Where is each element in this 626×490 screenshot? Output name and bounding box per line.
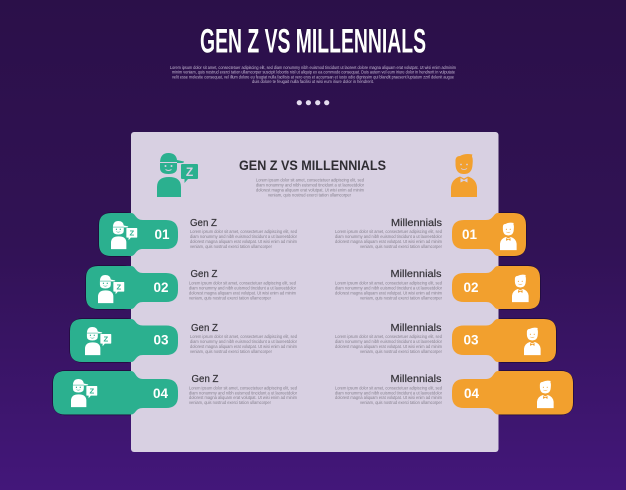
number 02: 02 [463,280,479,295]
row 1 right text: veniam, quis nostrud exerci tation ullamcorper [360,244,442,249]
row 4 right: millennial tab [452,371,573,414]
row 1 right: millennial tab [452,213,526,256]
row 4 right text: veniam, quis nostrud exerci tation ullamcorper [360,400,442,405]
main panel [131,132,498,452]
row 4 right text: Lorem ipsum dolor sit amet, consectetuer adipiscing elit, sed [335,386,442,390]
number 03: 03 [463,332,479,348]
row 3 left text: diam nonummy and nibh euismod tincidunt a ut laoreetdolor [190,339,297,344]
row 1 left text: veniam, quis nostrud exerci tation ullamcorper [190,244,272,249]
row 3 right text: diam nonummy and nibh euismod tincidunt a ut laoreetdolor [335,339,442,344]
intro text: minim veniam, quis nostrud exerci tation ullamcorper suscipit lobortis nisl ut aliquip ex ea commodo consequat. Duis autem vel eum iriure dolor in hendrerit in vulputate [172,70,455,75]
intro text: Lorem ipsum dolor sit amet, consectetuer adipiscing elit, sed diam nonummy nibh euismod tincidunt ut laoreet dolore magna aliquam erat volutpat. Ut wisi enim adminim [170,65,456,70]
intro text [170,65,456,84]
row 2 left text: Gen Z [190,269,218,280]
row 1 left text: diam nonummy and nibh euismod tincidunt a ut laoreetdolor [190,234,297,239]
row 2 left text [189,269,296,300]
number 04: 04 [464,386,479,401]
icon: millennial white 3 [524,328,541,355]
row 2 left text: dolorest magna aliquam erat volutpat. Ut wisi enim ad minim [189,290,296,296]
intro text: velit esse molestie consequat, vel illum dolore eu feugiat nulla facilisis at vero eros et accumsan et iusto odio dignissim qui blandit praesent luptatum zzril delenit augue [172,74,454,79]
number 03: 03 [153,332,169,348]
row 3 right: millennial tab [452,319,556,362]
intro text: duis dolore te feugait nulla facilisi ut wisi eum iriure dolor in hendrerit. [252,79,374,84]
panel description: Lorem ipsum dolor sit amet, consectetuer adipiscing elit, sed [256,178,364,182]
panel description: diam nonummy and nibh euismod tincidunt a ut laoreetdolor [256,182,364,188]
icon: millennial white 1 [500,223,517,250]
row 2 right text: Lorem ipsum dolor sit amet, consectetuer adipiscing elit, sed [335,280,442,286]
icon: gen z large: Z [186,165,193,179]
row 3 left text: dolorest magna aliquam erat volutpat. Ut wisi enim ad minim [190,344,297,349]
row 3 left text: Gen Z [191,323,218,334]
row 1 right text: Lorem ipsum dolor sit amet, consectetuer adipiscing elit, sed [335,229,442,234]
icon: millennial white 2 [512,275,529,302]
row 4 left text: Gen Z [192,374,218,385]
icon: gen z white 4: Z [89,387,94,396]
row 3 right text: dolorest magna aliquam erat volutpat. Ut wisi enim ad minim [335,344,442,349]
row 4 left text: Lorem ipsum dolor sit amet, consectetuer adipiscing elit, sed [189,386,297,390]
row 2 left text: diam nonummy and nibh euismod tincidunt a ut laoreetdolor [189,286,296,290]
row 1 left text: Lorem ipsum dolor sit amet, consectetuer adipiscing elit, sed [190,229,297,234]
row 4 left text: veniam, quis nostrud exerci tation ullamcorper [189,400,271,405]
row 1 right text: Millennials [391,218,442,229]
row 2 right: millennial tab [452,266,540,309]
row 2 left: gen z tab [86,266,178,309]
panel description: dolorest magna aliquam erat volutpat. Ut wisi enim ad minim [256,188,364,192]
row 4 right text [335,374,442,405]
row 1 left text [190,218,297,249]
number 01: 01 [154,227,170,242]
row 4 left text [189,374,297,405]
panel description: veniam, quis nostrud exerci tation ullamcorper [268,192,351,198]
title: GEN Z VS MILLENNIALS [200,22,426,60]
icon: gen z white 2: Z [116,283,121,292]
icon: millennial large [451,154,477,197]
pagination dots [297,100,329,105]
row 4 right text: Millennials [390,374,442,385]
icon: gen z white 1: Z [129,229,134,238]
row 1 right text: diam nonummy and nibh euismod tincidunt a ut laoreetdolor [335,234,442,239]
row 2 left text: Lorem ipsum dolor sit amet, consectetuer adipiscing elit, sed [189,280,296,286]
row 2 right text [335,269,442,300]
row 3 right text: Lorem ipsum dolor sit amet, consectetuer adipiscing elit, sed [335,334,442,339]
row 1 right text [335,218,442,249]
row 4 left: gen z tab [53,371,178,414]
number 02: 02 [153,280,169,295]
row 1 left: gen z tab [99,213,178,256]
row 3 right text: veniam, quis nostrud exerci tation ullamcorper [360,349,442,354]
number 04: 04 [153,386,168,401]
row 4 left text: diam nonummy and nibh euismod tincidunt a ut laoreetdolor [189,390,297,395]
row 1 right text: dolorest magna aliquam erat volutpat. Ut wisi enim ad minim [335,239,442,244]
row 3 right text: Millennials [390,323,442,334]
row 2 left text: veniam, quis nostrud exerci tation ullamcorper [189,296,271,300]
row 3 right text [335,323,442,354]
row 2 right text: diam nonummy and nibh euismod tincidunt a ut laoreetdolor [335,286,442,290]
row 4 left text: dolorest magna aliquam erat volutpat. Ut wisi enim ad minim [189,395,297,400]
icon: gen z white 3: Z [103,335,108,344]
row 1 left text: Gen Z [190,218,217,229]
number 01: 01 [462,227,477,242]
panel heading: GEN Z VS MILLENNIALS [239,158,386,173]
row 2 right text: dolorest magna aliquam erat volutpat. Ut wisi enim ad minim [335,290,442,296]
row 3 left: gen z tab [70,319,178,362]
row 3 left text [190,323,297,354]
row 4 right text: diam nonummy and nibh euismod tincidunt a ut laoreetdolor [335,390,442,395]
row 2 right text: Millennials [390,269,442,280]
row 3 left text: Lorem ipsum dolor sit amet, consectetuer adipiscing elit, sed [190,334,297,339]
row 3 left text: veniam, quis nostrud exerci tation ullamcorper [190,349,272,354]
row 1 left text: dolorest magna aliquam erat volutpat. Ut wisi enim ad minim [190,239,297,244]
row 4 right text: dolorest magna aliquam erat volutpat. Ut wisi enim ad minim [335,395,442,400]
panel description [256,178,364,198]
icon: millennial white 4 [537,381,554,408]
row 2 right text: veniam, quis nostrud exerci tation ullamcorper [360,296,442,300]
icon: gen z large [157,153,198,197]
